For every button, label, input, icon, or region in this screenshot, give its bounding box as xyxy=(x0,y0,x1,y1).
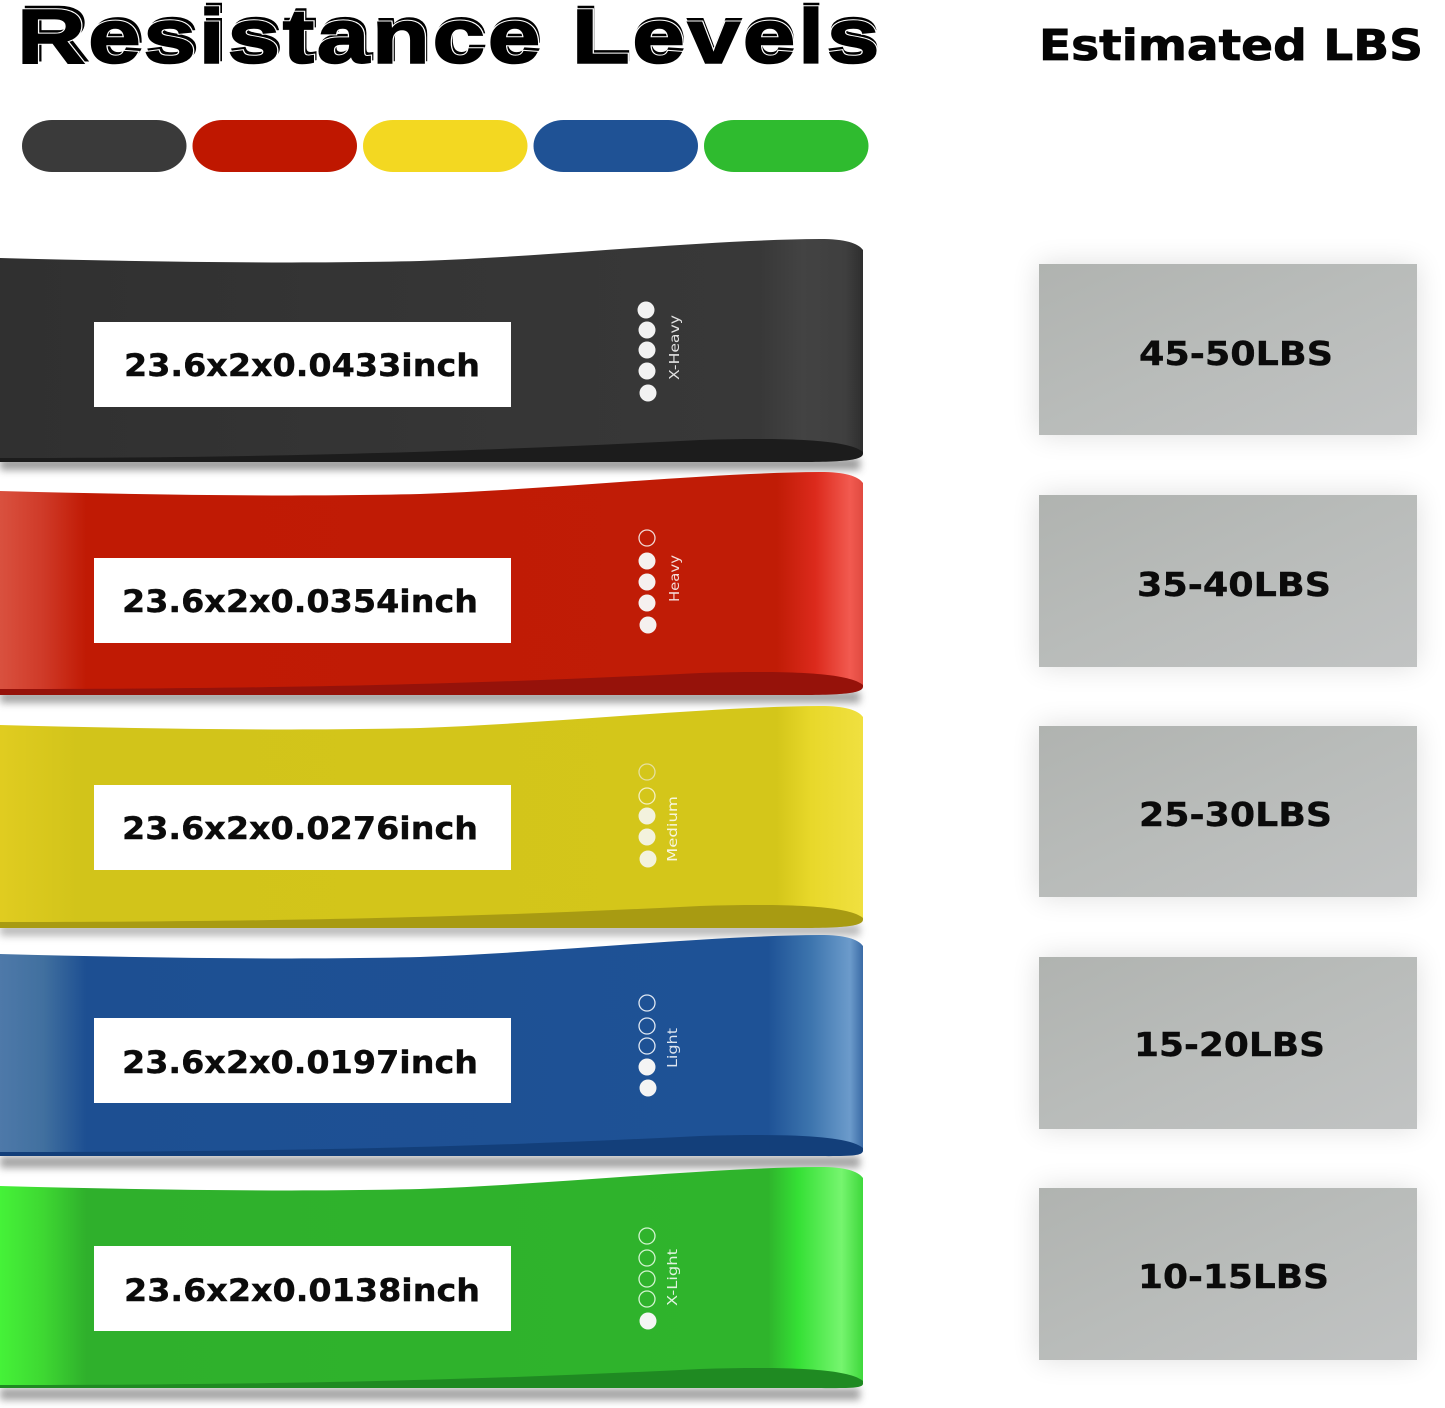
label: heavy size xyxy=(94,558,511,643)
level name: x-heavy: X-Heavy xyxy=(668,315,683,380)
panel: heavy band xyxy=(0,472,863,703)
colour swatches xyxy=(22,120,868,172)
card: 15-20lbs: 15-20LBS xyxy=(1134,1025,1325,1064)
level name: medium: Medium xyxy=(666,796,681,862)
label: heavy size: 23.6x2x0.0354inch xyxy=(122,584,478,620)
card: 45-50lbs: 45-50LBS xyxy=(1139,334,1333,373)
card: 45-50lbs xyxy=(1039,264,1417,435)
card: 35-40lbs: 35-40LBS xyxy=(1137,565,1331,604)
rating dots: x-heavy xyxy=(638,302,656,402)
panel: light band xyxy=(0,935,863,1168)
level name: heavy: Heavy xyxy=(668,555,683,602)
card: 25-30lbs: 25-30LBS xyxy=(1139,795,1332,834)
label: medium size: 23.6x2x0.0276inch xyxy=(122,811,478,847)
rating dots: heavy xyxy=(638,530,656,634)
card: 10-15lbs: 10-15LBS xyxy=(1138,1257,1329,1296)
label: light size: 23.6x2x0.0197inch xyxy=(122,1045,478,1081)
level name: x-light: X-Light xyxy=(666,1249,681,1306)
label: light size xyxy=(94,1018,511,1103)
card: 35-40lbs xyxy=(1039,495,1417,667)
label: x-heavy size: 23.6x2x0.0433inch xyxy=(124,348,480,384)
label: x-heavy size xyxy=(94,322,511,407)
panel: medium band xyxy=(0,706,863,936)
label: x-light size xyxy=(94,1246,511,1331)
heading: estimated lbs: Estimated LBS xyxy=(1039,21,1423,71)
rating dots: x-light xyxy=(639,1228,656,1330)
label: medium size xyxy=(94,785,511,870)
level name: light: Light xyxy=(666,1028,681,1068)
panel: x-light band xyxy=(0,1167,863,1400)
card: 10-15lbs xyxy=(1039,1188,1417,1360)
rating dots: medium xyxy=(638,764,656,868)
card: 15-20lbs xyxy=(1039,957,1417,1129)
card: 25-30lbs xyxy=(1039,726,1417,897)
rating dots: light xyxy=(638,995,656,1096)
label: x-light size: 23.6x2x0.0138inch xyxy=(124,1273,480,1309)
panel: x-heavy band xyxy=(0,239,863,470)
